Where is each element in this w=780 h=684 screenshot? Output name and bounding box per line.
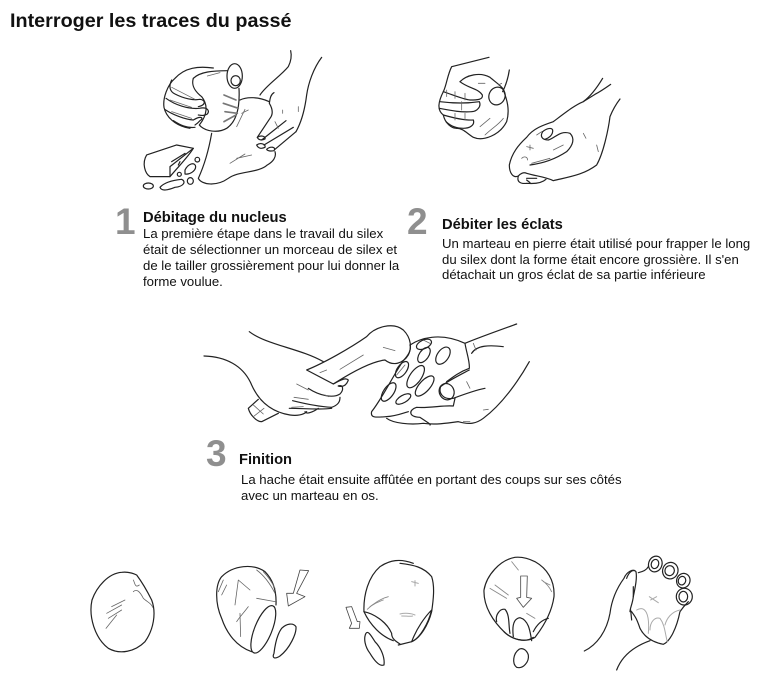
- body 2: [442, 236, 750, 282]
- body 2: du silex dont la forme était encore grossière. Il s'en: [442, 252, 739, 266]
- heading 3: Finition: [239, 452, 292, 468]
- step 1: number and text: [115, 201, 400, 289]
- step 2: number and text: [407, 201, 750, 282]
- heading 2: Débiter les éclats: [442, 217, 563, 233]
- illustration: fluted core with downward arrow: [484, 557, 554, 668]
- illustration: third stage roughout: [398, 563, 434, 645]
- number 2: 2: [407, 201, 428, 242]
- illustration: hands detaching flake: [439, 57, 620, 184]
- body 1: forme voulue.: [143, 274, 223, 289]
- illustration: rough flint nodule: [91, 572, 154, 652]
- body 1: de le tailler grossièrement pour lui donner la: [143, 258, 399, 273]
- step 3: number and text: [206, 433, 622, 502]
- number 3: 3: [206, 433, 227, 474]
- illustration: bone hammer retouching the axe: [204, 324, 529, 425]
- illustration: second flake removed with arrow: [346, 560, 413, 665]
- body 3: [241, 472, 622, 502]
- body 1: La première étape dans le travail du silex: [143, 226, 383, 241]
- body 2: détachait un gros éclat de sa partie inférieure: [442, 267, 706, 282]
- illustration: hand holding finished axe: [584, 554, 692, 670]
- body 3: La hache était ensuite affûtée en portant des coups sur ses côtés: [241, 472, 622, 487]
- number 1: 1: [115, 201, 136, 242]
- body 1: était de sélectionner un morceau de silex et: [143, 242, 397, 257]
- heading 1: Débitage du nucleus: [143, 210, 287, 226]
- body 2: Un marteau en pierre était utilisé pour frapper le long: [442, 236, 750, 251]
- body 3: avec un marteau en os.: [241, 488, 379, 502]
- body 1: [143, 226, 400, 289]
- illustration: hands striking flint nucleus: [143, 51, 322, 190]
- illustration: first flake removed with arrow: [217, 566, 309, 658]
- title: Interroger les traces du passé: [10, 10, 291, 32]
